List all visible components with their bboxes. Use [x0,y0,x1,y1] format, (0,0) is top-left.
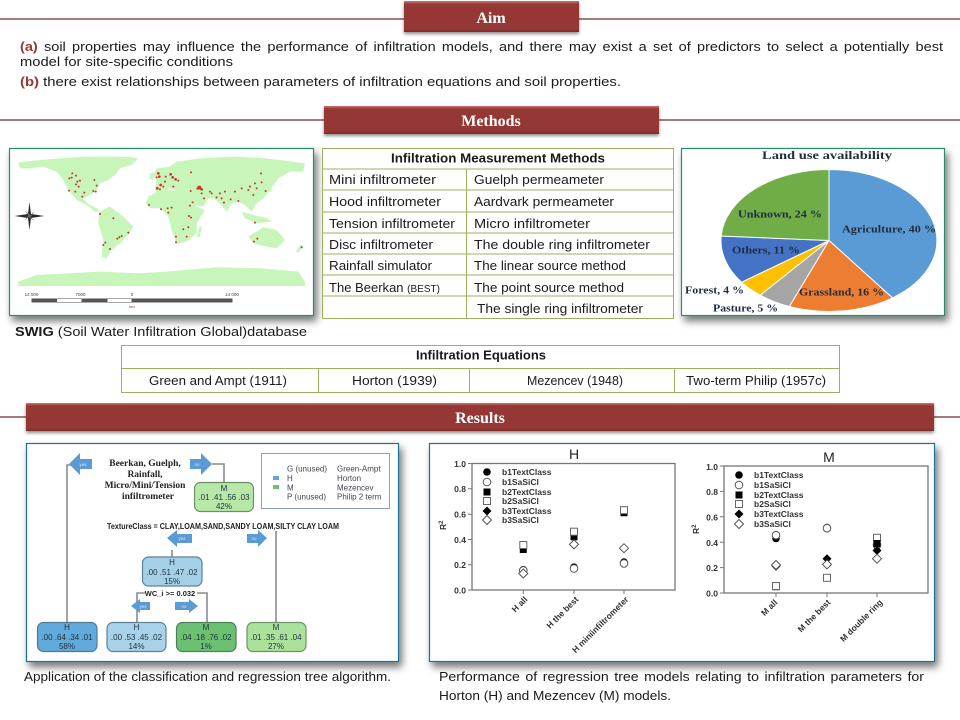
table: infiltration measurement methods: The point source method [474,280,624,295]
chart: Horton H: 0.0 [454,586,466,596]
legend: P (unused) [287,492,326,502]
table: infiltration measurement methods [322,148,674,318]
chart: Horton H: 0.4 [454,535,466,545]
tree node: H 15%: 15% [164,577,180,586]
chart: Mezencev M: 0.4 [706,538,718,548]
scale bar: km [129,304,135,309]
table: infiltration measurement methods: Aardvark permeameter [474,194,615,209]
chart: Horton H: H miniinfiltrometer [570,594,631,655]
tree node: H 58%: 58% [59,642,75,651]
charts caption [439,669,925,703]
chart: Mezencev M: b2TextClass [754,490,804,500]
arrow: yes middle: yes [178,536,186,541]
table: infiltration measurement methods: The single ring infiltrometer [477,301,644,316]
table: infiltration measurement methods: Guelph permeameter [474,172,605,187]
tree node: M 1%: M [203,623,210,632]
pie slices [721,170,937,311]
aim text block: (a) soil properties may influence the performance of infiltration models, and there may exist a set of predictors to select a potentially best [20,39,943,54]
table: infiltration equations: Green and Ampt (1911) [149,373,287,388]
heading: Methods [324,106,659,134]
arrow: yes top: yes [79,462,87,467]
chart: Horton H: H [569,446,579,462]
tree node: H 15% [142,557,202,586]
scale bar [25,292,239,309]
tree annotation: instruments [105,459,186,502]
heading: Methods: Methods [461,113,521,130]
table: infiltration measurement methods: Mini infiltrometer [329,172,437,187]
heading: Aim [404,1,579,32]
charts caption: Performance of regression tree models relating to infiltration parameters for [439,669,925,684]
pie labels: Pasture, 5 % [713,304,778,314]
pie labels: Grassland, 16 % [799,288,884,298]
aim text block [20,39,943,89]
arrow: no middle: no [251,536,257,541]
legend: Horton [337,474,361,483]
chart: Horton H: H all [510,594,529,614]
table: infiltration measurement methods: The double ring infiltrometer [474,237,651,252]
scale bar: 14 000 [225,292,239,297]
legend: Mezencev [337,484,373,492]
chart: Mezencev M: R [691,528,701,534]
table: infiltration measurement methods: Rainfall simulator [329,258,433,273]
scale bar: 0 [131,292,134,297]
arrow: no lower [175,599,198,613]
map caption: SWIG (Soil Water Infiltration Global)database [15,324,307,339]
panel: world map of SWIG database [10,148,314,316]
chart: Horton H: b1SaSiCl [502,477,539,487]
chart: Mezencev M: b3SaSiCl [754,519,791,529]
chart: Horton H: 0.2 [454,560,466,570]
chart: Mezencev M: 0.0 [706,588,718,598]
table: infiltration equations: Horton (1939) [352,373,437,388]
heading: Results [26,403,934,431]
table: infiltration equations [121,346,840,393]
chart: Horton H: H the best [544,594,581,630]
legend: M [287,484,294,492]
chart: Mezencev M: M all [759,597,779,618]
arrow: no middle [247,530,267,547]
chart: Mezencev M: 2 [692,524,698,528]
tree node: root M [194,482,254,512]
tree annotation: instruments: Micro/Mini/Tension [105,481,186,491]
split label: texture class: TextureClass = CLAY,LOAM,SAND,SANDY LOAM,SILTY CLAY LOAM [107,522,339,531]
arrow: no top: no [194,462,200,467]
table: infiltration measurement methods: Infiltration Measurement Methods [391,150,605,166]
table: infiltration measurement methods: Tension infiltrometer [329,216,456,231]
chart: Horton H: 0.6 [454,510,466,520]
aim text block: (b) there exist relationships between parameters of infiltration equations and soil properties. [20,74,621,89]
chart: Horton H: b1TextClass [502,467,552,477]
chart: Mezencev M: 0.8 [706,487,718,497]
chart: Mezencev M: 0.6 [706,512,718,522]
tree node: M 27%: M [273,623,280,632]
tree node: M 1%: 1% [200,642,212,651]
chart: Mezencev M: b3TextClass [754,509,804,519]
heading: Results: Results [455,410,505,427]
chart: Mezencev M: b1TextClass [754,470,804,480]
data points [68,171,303,250]
tree node: M 27% [247,622,306,652]
panel: land use availability pie chart [682,148,944,316]
arrow: yes top [69,453,92,475]
legend [262,454,390,508]
tree caption: Application of the classification and regression tree algorithm. [24,669,391,684]
arrow: no lower: no [181,604,187,609]
arrow: no top [190,453,212,475]
legend: G (unused) [287,464,327,474]
tree node: root M: M [221,484,228,493]
table: infiltration measurement methods: The Beerkan (BEST) [329,280,440,295]
tree annotation: instruments: Rainfall, [127,470,163,480]
pie labels: Others, 11 % [732,246,800,256]
pie labels: Agriculture, 40 % [842,224,936,236]
chart: Mezencev M: 0.2 [706,563,718,573]
tree node: H 14%: 14% [128,642,145,651]
tree node: H 58%: H [64,623,70,632]
icon: compass rose [14,202,44,230]
chart: Horton H: 0.8 [454,484,466,494]
table: infiltration equations: Mezencev (1948) [527,373,623,388]
chart: Horton H: b3TextClass [502,506,552,516]
tree branches [67,464,276,622]
tree node: H 14% [107,622,166,652]
aim text block: model for site-specific conditions [20,54,234,69]
pie labels: Unknown, 24 % [738,210,822,220]
table: infiltration measurement methods: The linear source method [474,258,626,273]
chart: Horton H: b2TextClass [502,487,552,497]
table: infiltration measurement methods: Hood infiltrometer [329,194,442,209]
scale bar: 7000 [75,292,86,297]
tree node: M 1%: .04 .18 .76 .02 [180,633,232,642]
legend: Green-Ampt [337,464,381,474]
arrow: yes lower: yes [139,604,147,609]
chart: Horton H: b2SaSiCl [502,496,539,506]
divider: aim [0,18,960,20]
chart: Horton H: 1.0 [454,459,466,469]
split label: WC_i: WC_i >= 0.032 [145,589,195,598]
divider: methods [0,119,960,121]
chart: Mezencev M: b1SaSiCl [754,480,791,490]
charts caption: Horton (H) and Mezencev (M) models. [439,688,671,703]
tree node: M 1% [176,622,236,652]
tree node: M 27%: .01 .35 .61 .04 [250,633,302,642]
tree node: H 58%: .00 .64 .34 .01 [41,633,93,642]
chart: Horton H: 2 [439,520,445,524]
pie labels [685,210,936,314]
land masses [18,157,305,286]
chart: Mezencev M: M double ring [838,597,884,644]
tree annotation: instruments: Beerkan, Guelph, [109,459,181,469]
chart: Horton H [438,446,675,655]
chart: Mezencev M: b2SaSiCl [754,499,791,509]
pie labels: Forest, 4 % [685,286,744,296]
table: infiltration measurement methods: Micro infiltrometer [474,216,591,231]
scale bar: 14 000 [25,292,39,297]
chart: Mezencev M [691,449,928,644]
legend: Philip 2 term [337,492,382,502]
chart: Mezencev M: M [823,449,835,465]
chart: Horton H: R [438,524,448,530]
heading: Aim: Aim [476,10,506,27]
table: infiltration measurement methods: Disc infiltrometer [329,237,434,252]
panel: classification and regression tree [26,444,398,662]
arrow: yes middle [167,530,192,547]
tree node: H 58% [38,622,97,652]
tree node: root M: .01 .41 .56 .03 [198,493,250,502]
tree node: H 14%: H [134,623,140,632]
table: infiltration equations: Two-term Philip (1957c) [686,373,826,388]
tree node: root M: 42% [216,502,232,511]
chart: Mezencev M: M the best [796,597,833,634]
chart title: Land use availability [762,150,892,162]
panel: regression tree performance charts [430,444,934,662]
chart: Horton H: b3SaSiCl [502,515,539,525]
tree node: H 15%: H [169,558,175,567]
tree annotation: instruments: infiltrometer [122,492,175,502]
chart: Mezencev M: 1.0 [706,462,718,472]
divider: results [0,416,960,418]
tree node: H 14%: .00 .53 .45 .02 [111,633,163,642]
arrow: yes lower [131,599,150,613]
tree node: M 27%: 27% [268,642,284,651]
legend: H [287,474,293,483]
table: infiltration equations: Infiltration Equations [416,348,546,362]
tree node: H 15%: .00 .51 .47 .02 [146,568,198,577]
